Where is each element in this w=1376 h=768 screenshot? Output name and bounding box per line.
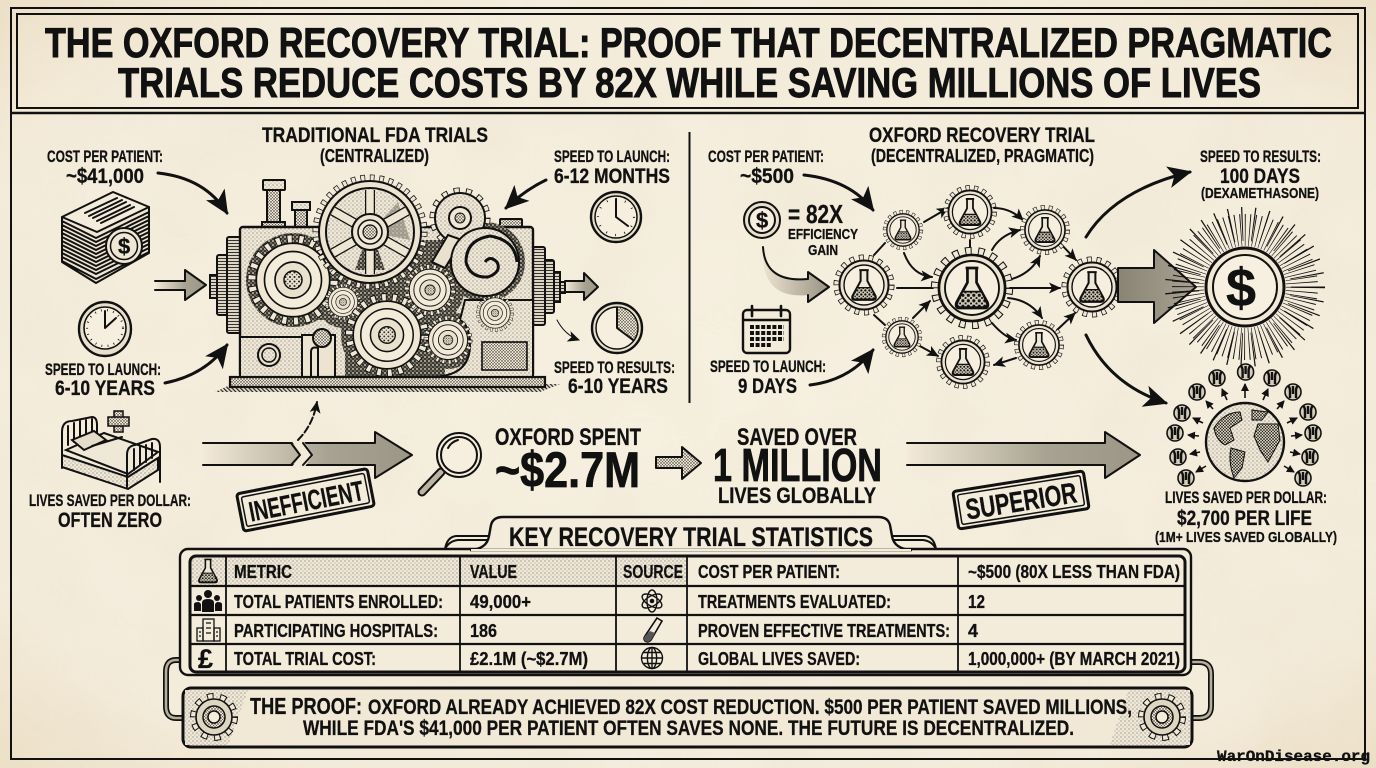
machine gears [252, 240, 334, 320]
proof text: WHILE FDA'S $41,000 PER PATIENT OFTEN SAVES NONE. THE FUTURE IS DECENTRALIZED. [303, 716, 1074, 740]
icon: hospital bed [62, 411, 160, 489]
lives saved label left [29, 492, 191, 532]
cost per patient oxford: COST PER PATIENT: [708, 148, 824, 166]
speed to launch years label: 6-10 YEARS [55, 376, 155, 400]
icon: paper and money stack [62, 192, 149, 283]
oxford spent callout: OXFORD SPENT [495, 424, 641, 451]
connector brackets [166, 660, 1211, 718]
panel: the proof banner [183, 688, 1192, 747]
speed to launch months label: SPEED TO LAUNCH: [554, 148, 670, 166]
arrow: cost to network [804, 175, 873, 210]
speed to launch months label: 6-12 MONTHS [554, 164, 670, 188]
efficiency gain callout: GAIN [808, 243, 838, 259]
arrow: spent to saved [656, 447, 701, 479]
icon: radiant dollar sun: $ [1226, 258, 1256, 318]
icon: test tube [644, 618, 662, 642]
icon: left gear [194, 697, 234, 737]
arrow: down to globe [1086, 335, 1166, 403]
icon: clock lower right [592, 303, 642, 353]
machine body [240, 227, 533, 377]
saved over callout: LIVES GLOBALLY [718, 483, 876, 508]
speed to results oxford: (DEXAMETHASONE) [1201, 186, 1319, 202]
icon: clock [79, 302, 131, 356]
arrow: years to machine [165, 345, 227, 383]
lower panels [240, 300, 533, 377]
curved gray arrow [763, 247, 829, 302]
table outer frame [180, 549, 1191, 675]
table text: TOTAL TRIAL COST: [234, 648, 376, 669]
icon: radiant dollar sun [1182, 224, 1308, 350]
arrow: results thin [557, 320, 579, 340]
icon: paper and money stack: $ [118, 234, 130, 259]
table text: 49,000+ [470, 591, 531, 612]
heading: traditional FDA: (CENTRALIZED) [320, 146, 429, 166]
speed to launch 9 days: SPEED TO LAUNCH: [710, 358, 826, 376]
panel: oxford recovery trial [708, 124, 1337, 546]
heading: oxford: (DECENTRALIZED, PRAGMATIC) [871, 146, 1094, 166]
table grid [190, 556, 1185, 672]
stamp: inefficient: INEFFICIENT [246, 475, 366, 528]
lives saved label right: (1M+ LIVES SAVED GLOBALLY) [1155, 530, 1337, 546]
arrow: dashed to machine [298, 402, 317, 440]
efficiency gain callout: = 82X [788, 199, 844, 229]
heading: traditional FDA [262, 124, 488, 166]
speed to results label [554, 359, 675, 398]
saved over callout: 1 MILLION [713, 439, 882, 491]
icon: dollar coin: $ [756, 208, 768, 233]
efficiency gain callout: EFFICIENCY [788, 227, 858, 243]
icon: globe with people [1167, 364, 1321, 486]
proof text: OXFORD ALREADY ACHIEVED 82X COST REDUCTION. $500 PER PATIENT SAVED MILLIONS, [368, 695, 1132, 719]
icon: dollar coin [744, 202, 780, 238]
speed to results oxford: SPEED TO RESULTS: [1200, 148, 1321, 166]
icon: hospital [197, 619, 220, 641]
speed to launch months label [554, 148, 670, 188]
icon: calendar [743, 306, 790, 353]
icon: table globe [642, 648, 662, 668]
speed to results label: 6-10 YEARS [568, 374, 668, 398]
table text: PROVEN EFFECTIVE TREATMENTS: [698, 620, 950, 641]
heading: oxford: OXFORD RECOVERY TRIAL [869, 124, 1095, 147]
lives saved label left: OFTEN ZERO [58, 508, 162, 532]
speed to launch years label: SPEED TO LAUNCH: [45, 361, 161, 379]
network connector arrows [874, 208, 1076, 365]
table text: PARTICIPATING HOSPITALS: [234, 620, 438, 641]
oxford spent callout [495, 424, 641, 498]
lives saved label left: LIVES SAVED PER DOLLAR: [29, 492, 191, 510]
machine upper right gear [432, 191, 487, 268]
speed to results oxford [1200, 148, 1321, 202]
lives saved label right [1155, 489, 1337, 546]
table text: TREATMENTS EVALUATED: [698, 591, 891, 612]
arrow: up to results [1086, 172, 1190, 237]
cost per patient label [47, 148, 163, 188]
machine stacks [262, 180, 522, 235]
table text: 12 [968, 591, 985, 612]
speed to launch 9 days [710, 358, 826, 398]
table text: METRIC [234, 561, 292, 582]
panel: traditional FDA trials [29, 124, 675, 532]
arrow into machine [155, 270, 206, 300]
saved over callout [713, 424, 882, 508]
lives saved label right: $2,700 PER LIFE [1177, 506, 1312, 530]
icon: complex gear machine [210, 178, 565, 392]
icon: table flask [199, 559, 217, 583]
machine spiral [451, 228, 519, 296]
icon: atom [640, 590, 664, 612]
arrow out of machine [565, 273, 598, 300]
broken arrow to magnifier [203, 432, 412, 478]
speed to launch 9 days: 9 DAYS [738, 374, 797, 398]
cost per patient oxford [708, 148, 824, 188]
table text: TOTAL PATIENTS ENROLLED: [234, 591, 443, 612]
heading: oxford [869, 124, 1095, 166]
table text: GLOBAL LIVES SAVED: [698, 648, 860, 669]
icon: pound sign: £ [198, 644, 213, 674]
table heading tab: KEY RECOVERY TRIAL STATISTICS [509, 522, 873, 552]
table text: £2.1M (~$2.7M) [470, 648, 588, 669]
saved over callout: SAVED OVER [737, 424, 857, 451]
divider [688, 132, 690, 403]
table text: 186 [470, 620, 497, 641]
efficiency gain callout [788, 199, 858, 259]
proof text [250, 693, 1132, 740]
network of lab gears [837, 188, 1119, 386]
big arrow to sun [1118, 250, 1196, 323]
oxford spent callout: ~$2.7M [495, 442, 640, 498]
machine base plate [230, 377, 545, 387]
icon: people [194, 590, 222, 612]
machine flanges [210, 237, 565, 333]
arrow: launch to network [810, 350, 873, 385]
icon: right gear [1142, 697, 1182, 737]
machine large top gear [316, 178, 424, 286]
cost per patient label: COST PER PATIENT: [47, 148, 163, 166]
table text: ~$500 (80X LESS THAN FDA) [968, 561, 1180, 582]
proof text: THE PROOF: [250, 693, 362, 719]
table text: VALUE [470, 561, 517, 582]
table text: 1,000,000+ (BY MARCH 2021) [968, 648, 1180, 669]
speed to results label: SPEED TO RESULTS: [554, 359, 675, 377]
stamp: superior: SUPERIOR [963, 477, 1079, 527]
arrow: months to machine [506, 180, 546, 208]
table text: COST PER PATIENT: [698, 561, 840, 582]
cost per patient label: ~$41,000 [66, 164, 144, 188]
panel: statistics table [166, 517, 1211, 718]
title [45, 19, 1332, 106]
cost per patient oxford: ~$500 [740, 164, 794, 188]
speed to results oxford: 100 DAYS [1220, 164, 1300, 188]
arrow to globe [907, 432, 1140, 478]
table text: SOURCE [623, 561, 683, 582]
icon: clock top right [591, 192, 641, 242]
dark gear chamber [246, 222, 525, 381]
table text: 4 [968, 620, 979, 641]
table text [234, 561, 1180, 669]
arrow: cost to machine [158, 173, 227, 213]
icon: magnifier [422, 433, 481, 492]
speed to launch years label [45, 361, 161, 400]
watermark: WarOnDisease.org [1217, 748, 1370, 766]
heading: traditional FDA: TRADITIONAL FDA TRIALS [262, 124, 488, 147]
stamp: inefficient [237, 469, 374, 531]
